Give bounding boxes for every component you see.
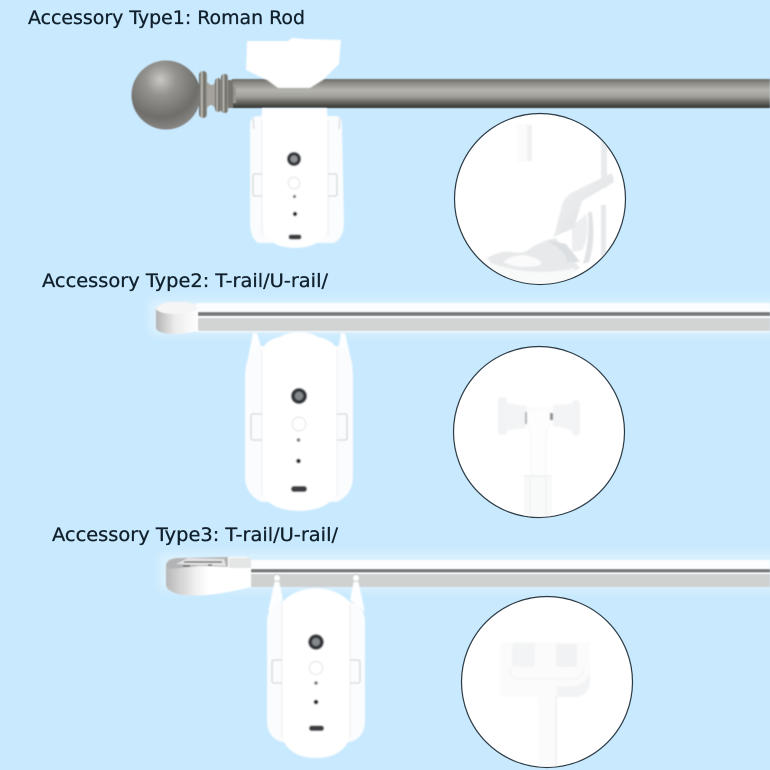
button [309,661,323,675]
heading: accessory type 3: Accessory Type3: T-rail/U-rail/ [52,524,339,546]
detail circle 3: bracket roller [462,596,632,768]
usb port [291,486,307,492]
lens [308,634,324,650]
button [288,177,300,189]
heading: accessory type 1: Accessory Type1: Roman Rod [28,7,305,29]
device 3: motor on bracket rail [267,574,365,758]
T-rail 3 with bracket end [166,557,770,596]
T-rail 2 with end cap [156,302,770,334]
roman rod with finial [132,60,770,130]
usb port [309,726,324,731]
usb port [288,234,302,240]
lens [291,388,307,404]
heading: accessory type 2: Accessory Type2: T-rail/U-rail/ [42,270,329,292]
detail circle 2: T-rail roller [454,346,624,518]
device 2: motor on T-rail [245,332,353,511]
device 1: motor on roman rod [250,108,344,248]
white clip on rod [246,38,341,88]
button [292,417,306,431]
detail circle 1: clip [454,114,626,290]
lens [287,152,301,166]
